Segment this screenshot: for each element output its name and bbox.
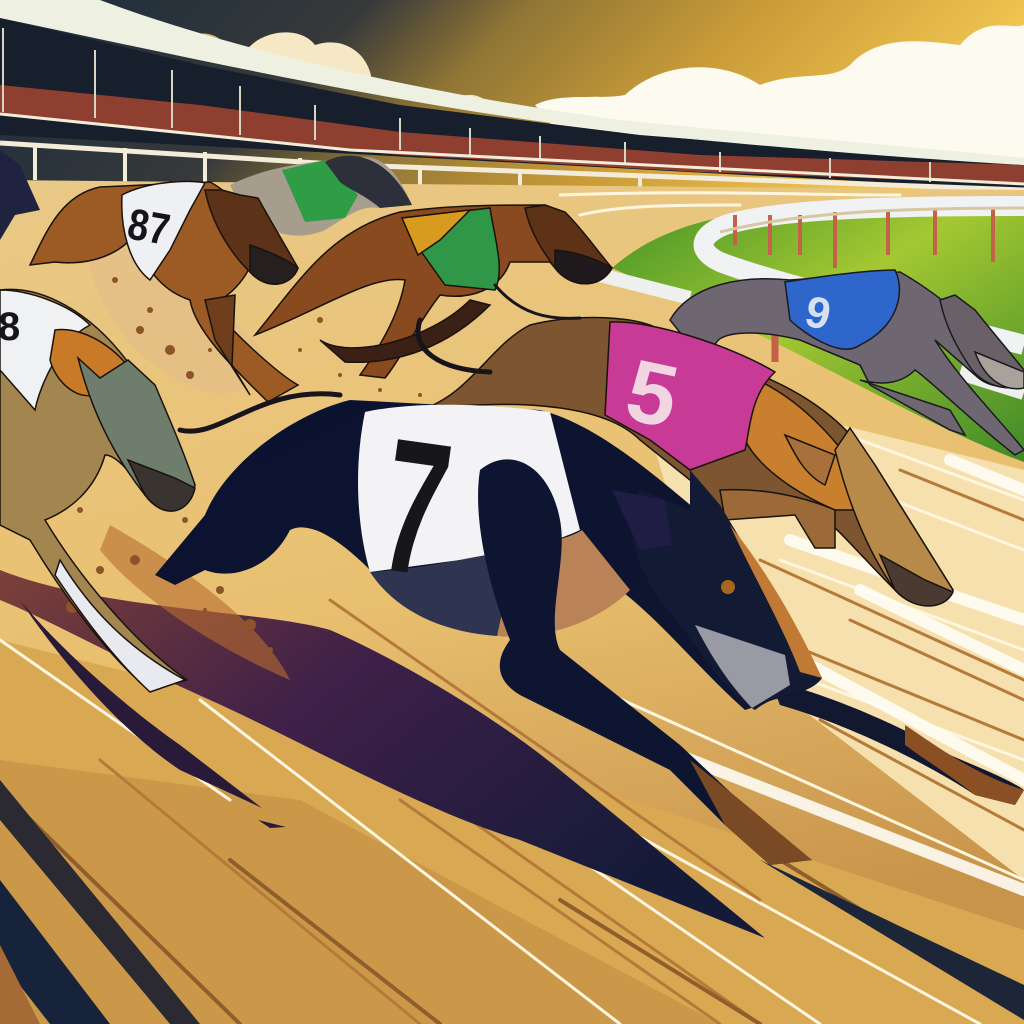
hind leg and body (30, 182, 298, 402)
dog: pink jacket number 5 (420, 318, 953, 606)
jacket number: 7 (369, 399, 462, 618)
dog: left tan with white jacket (0, 289, 195, 692)
bottom-left dark streaks (0, 780, 1024, 1024)
tails (180, 285, 580, 431)
jacket (358, 405, 580, 572)
head (205, 190, 298, 284)
sky (0, 0, 1024, 200)
head (835, 428, 953, 606)
dog: far left partial (0, 150, 40, 240)
far front leg (770, 680, 1024, 805)
muzzle (695, 625, 790, 708)
clouds (192, 25, 1024, 165)
body and legs (255, 205, 612, 378)
stand railing (0, 114, 1024, 190)
jacket (402, 208, 499, 290)
near front leg (478, 459, 812, 865)
dog: pink jacket number 5: 5 (618, 340, 687, 447)
dust cloud (66, 215, 422, 680)
body (155, 400, 822, 710)
dog: blue jacket number 9 (670, 270, 1024, 455)
jacket number: 87 (124, 199, 174, 255)
dog: black number 7 foreground (155, 399, 1024, 865)
jacket (122, 181, 205, 280)
dog: brown number 87 (30, 181, 298, 402)
head (940, 295, 1024, 388)
jacket (605, 322, 775, 470)
track shadow (0, 570, 765, 938)
infield grass (612, 198, 1024, 462)
body (420, 318, 953, 603)
dog: brown green and orange jacket (255, 205, 612, 378)
ear (785, 435, 835, 485)
dog: blue jacket number 9: 9 (801, 287, 835, 340)
grandstand (0, 0, 1024, 190)
head (78, 358, 195, 510)
head (632, 470, 822, 710)
infield rail (600, 206, 1024, 392)
dog: far grey green jacket (230, 156, 412, 236)
paw (720, 490, 835, 548)
white paw (55, 560, 185, 692)
ear (612, 490, 672, 550)
head (525, 205, 612, 284)
